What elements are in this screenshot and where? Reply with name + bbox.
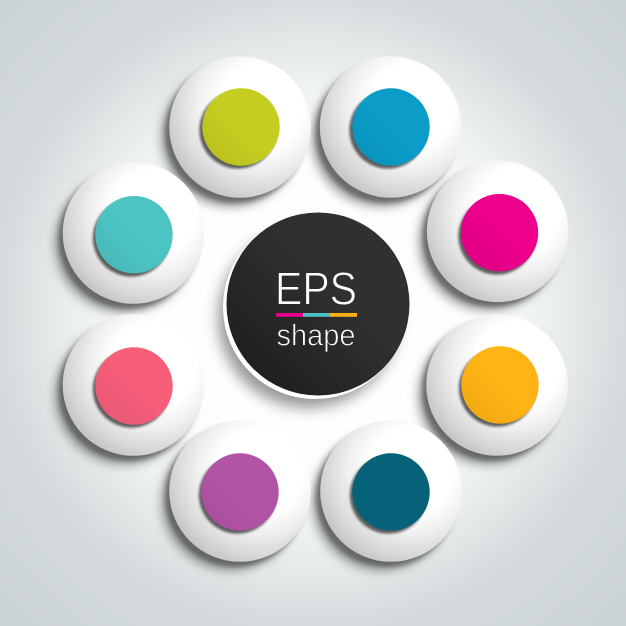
heading: EPS: EPS	[275, 262, 357, 314]
button: purple	[161, 420, 311, 571]
tri-colour bar	[276, 313, 357, 317]
label: shape: shape	[276, 318, 356, 352]
button: blue	[312, 56, 461, 207]
button: pink	[54, 314, 204, 465]
button: magenta	[419, 160, 568, 311]
button: orange	[418, 314, 568, 465]
center badge shadow	[218, 228, 398, 408]
button: lime	[161, 56, 311, 207]
button: dark teal	[312, 420, 462, 571]
button: cyan	[54, 162, 204, 313]
center badge	[223, 212, 410, 399]
